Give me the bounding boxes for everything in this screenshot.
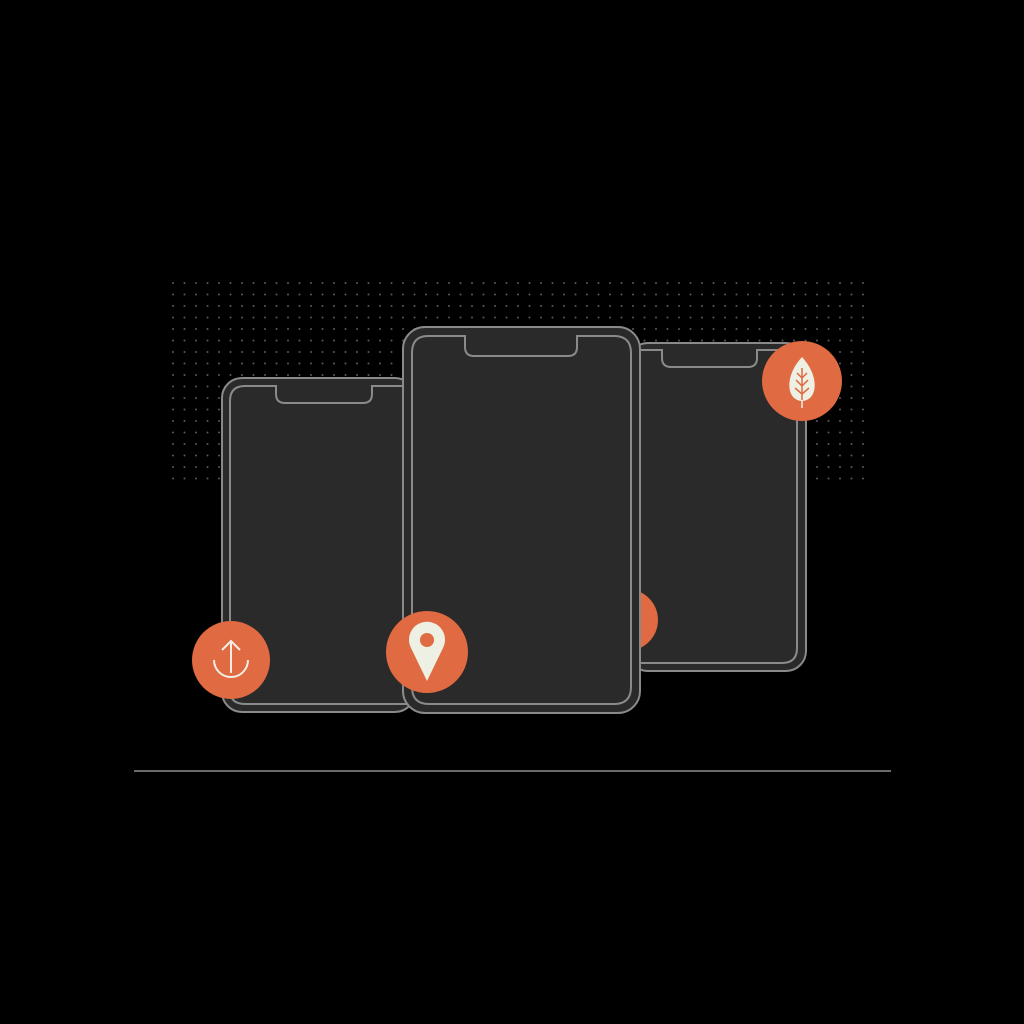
icon: location pin	[386, 611, 468, 693]
icon: partial orange circle	[596, 589, 658, 651]
icon: leaf	[762, 341, 842, 421]
baseline	[134, 770, 891, 772]
phone: left	[222, 378, 415, 712]
icon: upload	[192, 621, 270, 699]
phone: right	[628, 343, 806, 671]
phone: middle	[403, 327, 640, 713]
